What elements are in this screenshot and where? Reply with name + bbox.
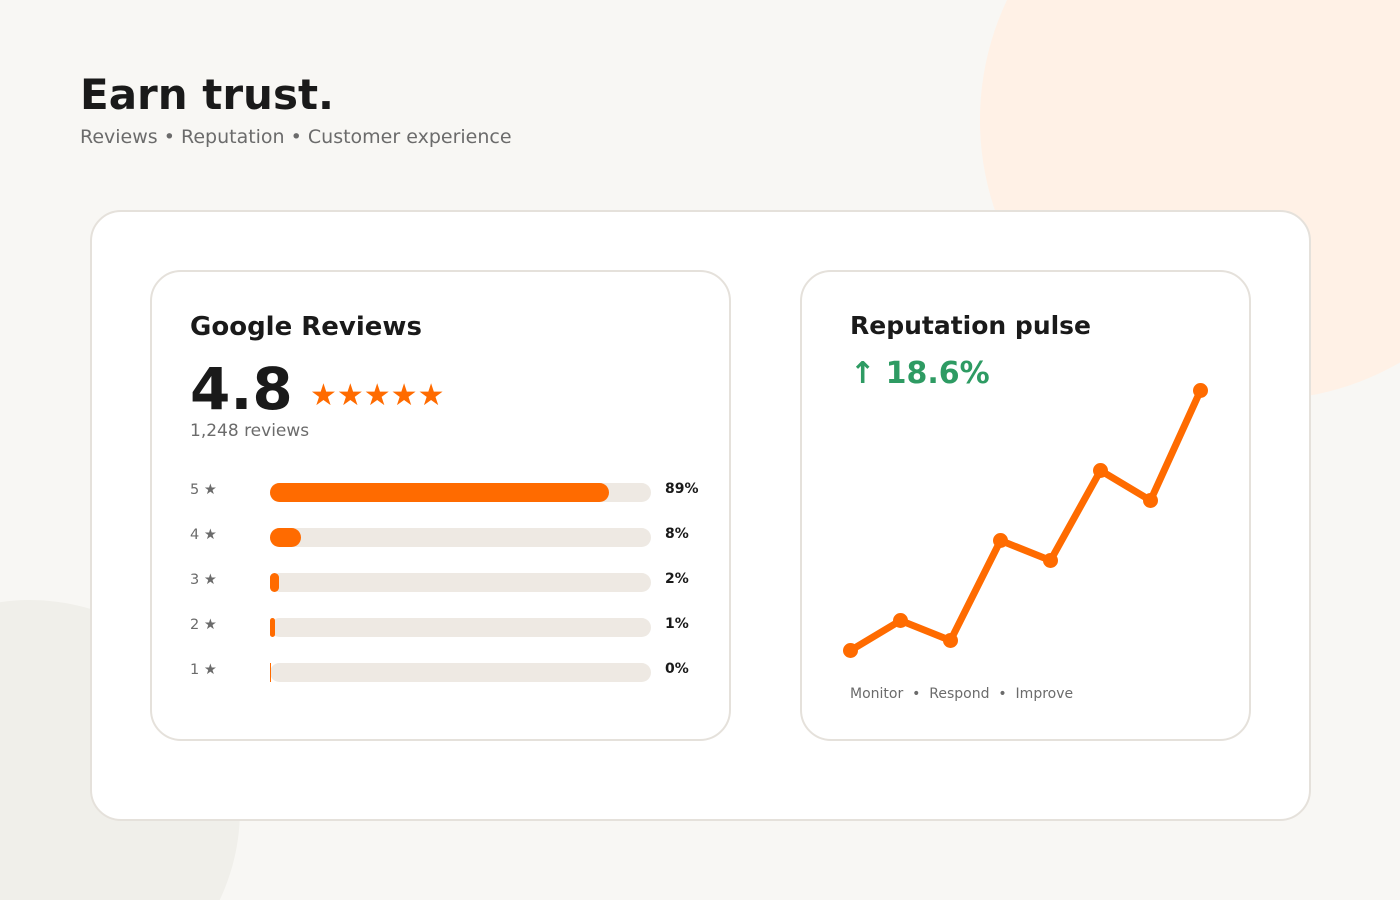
rating score: 4.8 bbox=[190, 355, 293, 423]
panel heading: Reputation pulse: Reputation pulse bbox=[850, 311, 1091, 340]
background circle: grey bbox=[0, 600, 240, 900]
review count: 1,248 reviews bbox=[190, 421, 309, 441]
main card bbox=[91, 211, 1310, 820]
line chart bbox=[843, 383, 1208, 658]
rating row: 3 stars bbox=[190, 571, 689, 592]
background circle: peach bbox=[980, 0, 1400, 400]
rating row: 3 stars: 3 ★ bbox=[190, 572, 217, 588]
title: Earn trust. bbox=[80, 70, 334, 119]
chart caption: Monitor • Respond • Improve bbox=[850, 686, 1073, 702]
growth figure: ↑ 18.6% bbox=[850, 356, 990, 391]
rating stars: ★★★★★ bbox=[310, 378, 444, 413]
rating row: 1 star bbox=[190, 661, 689, 682]
rating row: 3 stars: 2% bbox=[665, 571, 689, 587]
rating row: 5 stars: 89% bbox=[665, 481, 699, 497]
rating row: 2 stars: 1% bbox=[665, 616, 689, 632]
panel: Reputation pulse bbox=[801, 271, 1250, 740]
rating row: 4 stars: 8% bbox=[665, 526, 689, 542]
rating row: 5 stars bbox=[190, 481, 699, 502]
panel heading: Google Reviews: Google Reviews bbox=[190, 312, 422, 342]
rating row: 1 star: 1 ★ bbox=[190, 662, 217, 678]
rating row: 4 stars: 4 ★ bbox=[190, 527, 217, 543]
subtitle: Reviews • Reputation • Customer experience bbox=[80, 126, 512, 148]
rating row: 4 stars bbox=[190, 526, 689, 547]
rating row: 2 stars bbox=[190, 616, 689, 637]
rating row: 5 stars: 5 ★ bbox=[190, 482, 217, 498]
rating row: 2 stars: 2 ★ bbox=[190, 617, 217, 633]
rating row: 1 star: 0% bbox=[665, 661, 689, 677]
panel: Google Reviews bbox=[151, 271, 730, 740]
